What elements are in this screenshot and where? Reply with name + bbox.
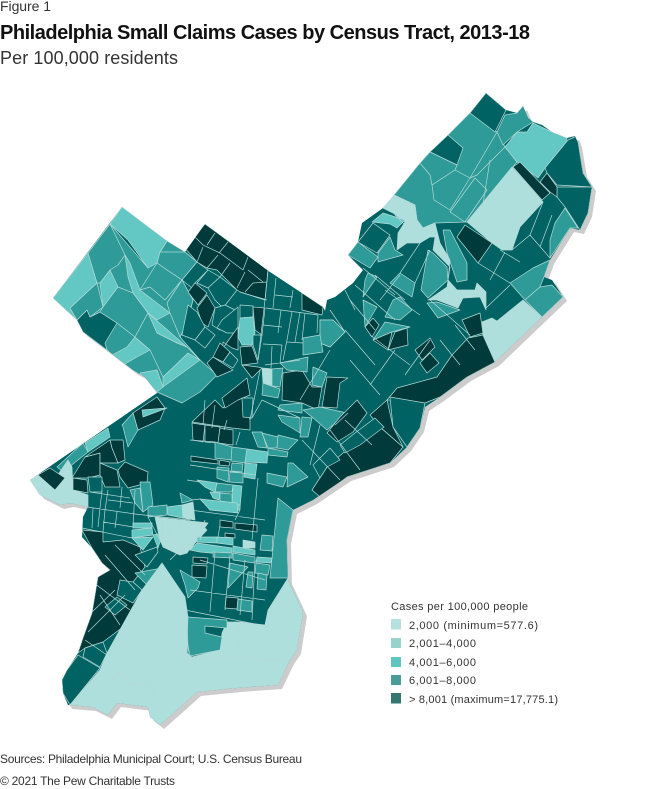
legend item: 2,001–4,000: 2,001–4,000 (409, 638, 476, 650)
lower northeast tracts (348, 223, 467, 373)
legend item: up to 2,000: 2,000 (minimum=577.6) (409, 620, 538, 632)
legend item: 6,001–8,000: 6,001–8,000 (409, 675, 476, 687)
legend heading: Cases per 100,000 people (391, 601, 528, 613)
south Philadelphia tracts (180, 498, 293, 656)
tract boundary grid lines (82, 160, 552, 705)
north central tracts (191, 357, 348, 510)
west Philadelphia tracts (30, 397, 208, 555)
legend item: over 8,001: > 8,001 (maximum=17,775.1) (409, 694, 558, 706)
copyright note: © 2021 The Pew Charitable Trusts (0, 774, 175, 788)
subtitle: Per 100,000 residents (0, 48, 178, 68)
legend (391, 601, 558, 706)
choropleth map of census tracts (30, 93, 592, 725)
river wards tracts (312, 313, 495, 497)
upper north Philadelphia tracts (182, 224, 345, 378)
southwest Philadelphia tracts (62, 530, 303, 725)
far northeast tracts (372, 93, 592, 362)
sources note: Sources: Philadelphia Municipal Court; U.S. Census Bureau (0, 752, 302, 766)
northwest Philadelphia tracts (53, 207, 217, 403)
map shadow (34, 97, 596, 729)
title: Philadelphia Small Claims Cases by Census Tract, 2013-18 (0, 22, 530, 44)
legend item: 4,001–6,000: 4,001–6,000 (409, 657, 476, 669)
